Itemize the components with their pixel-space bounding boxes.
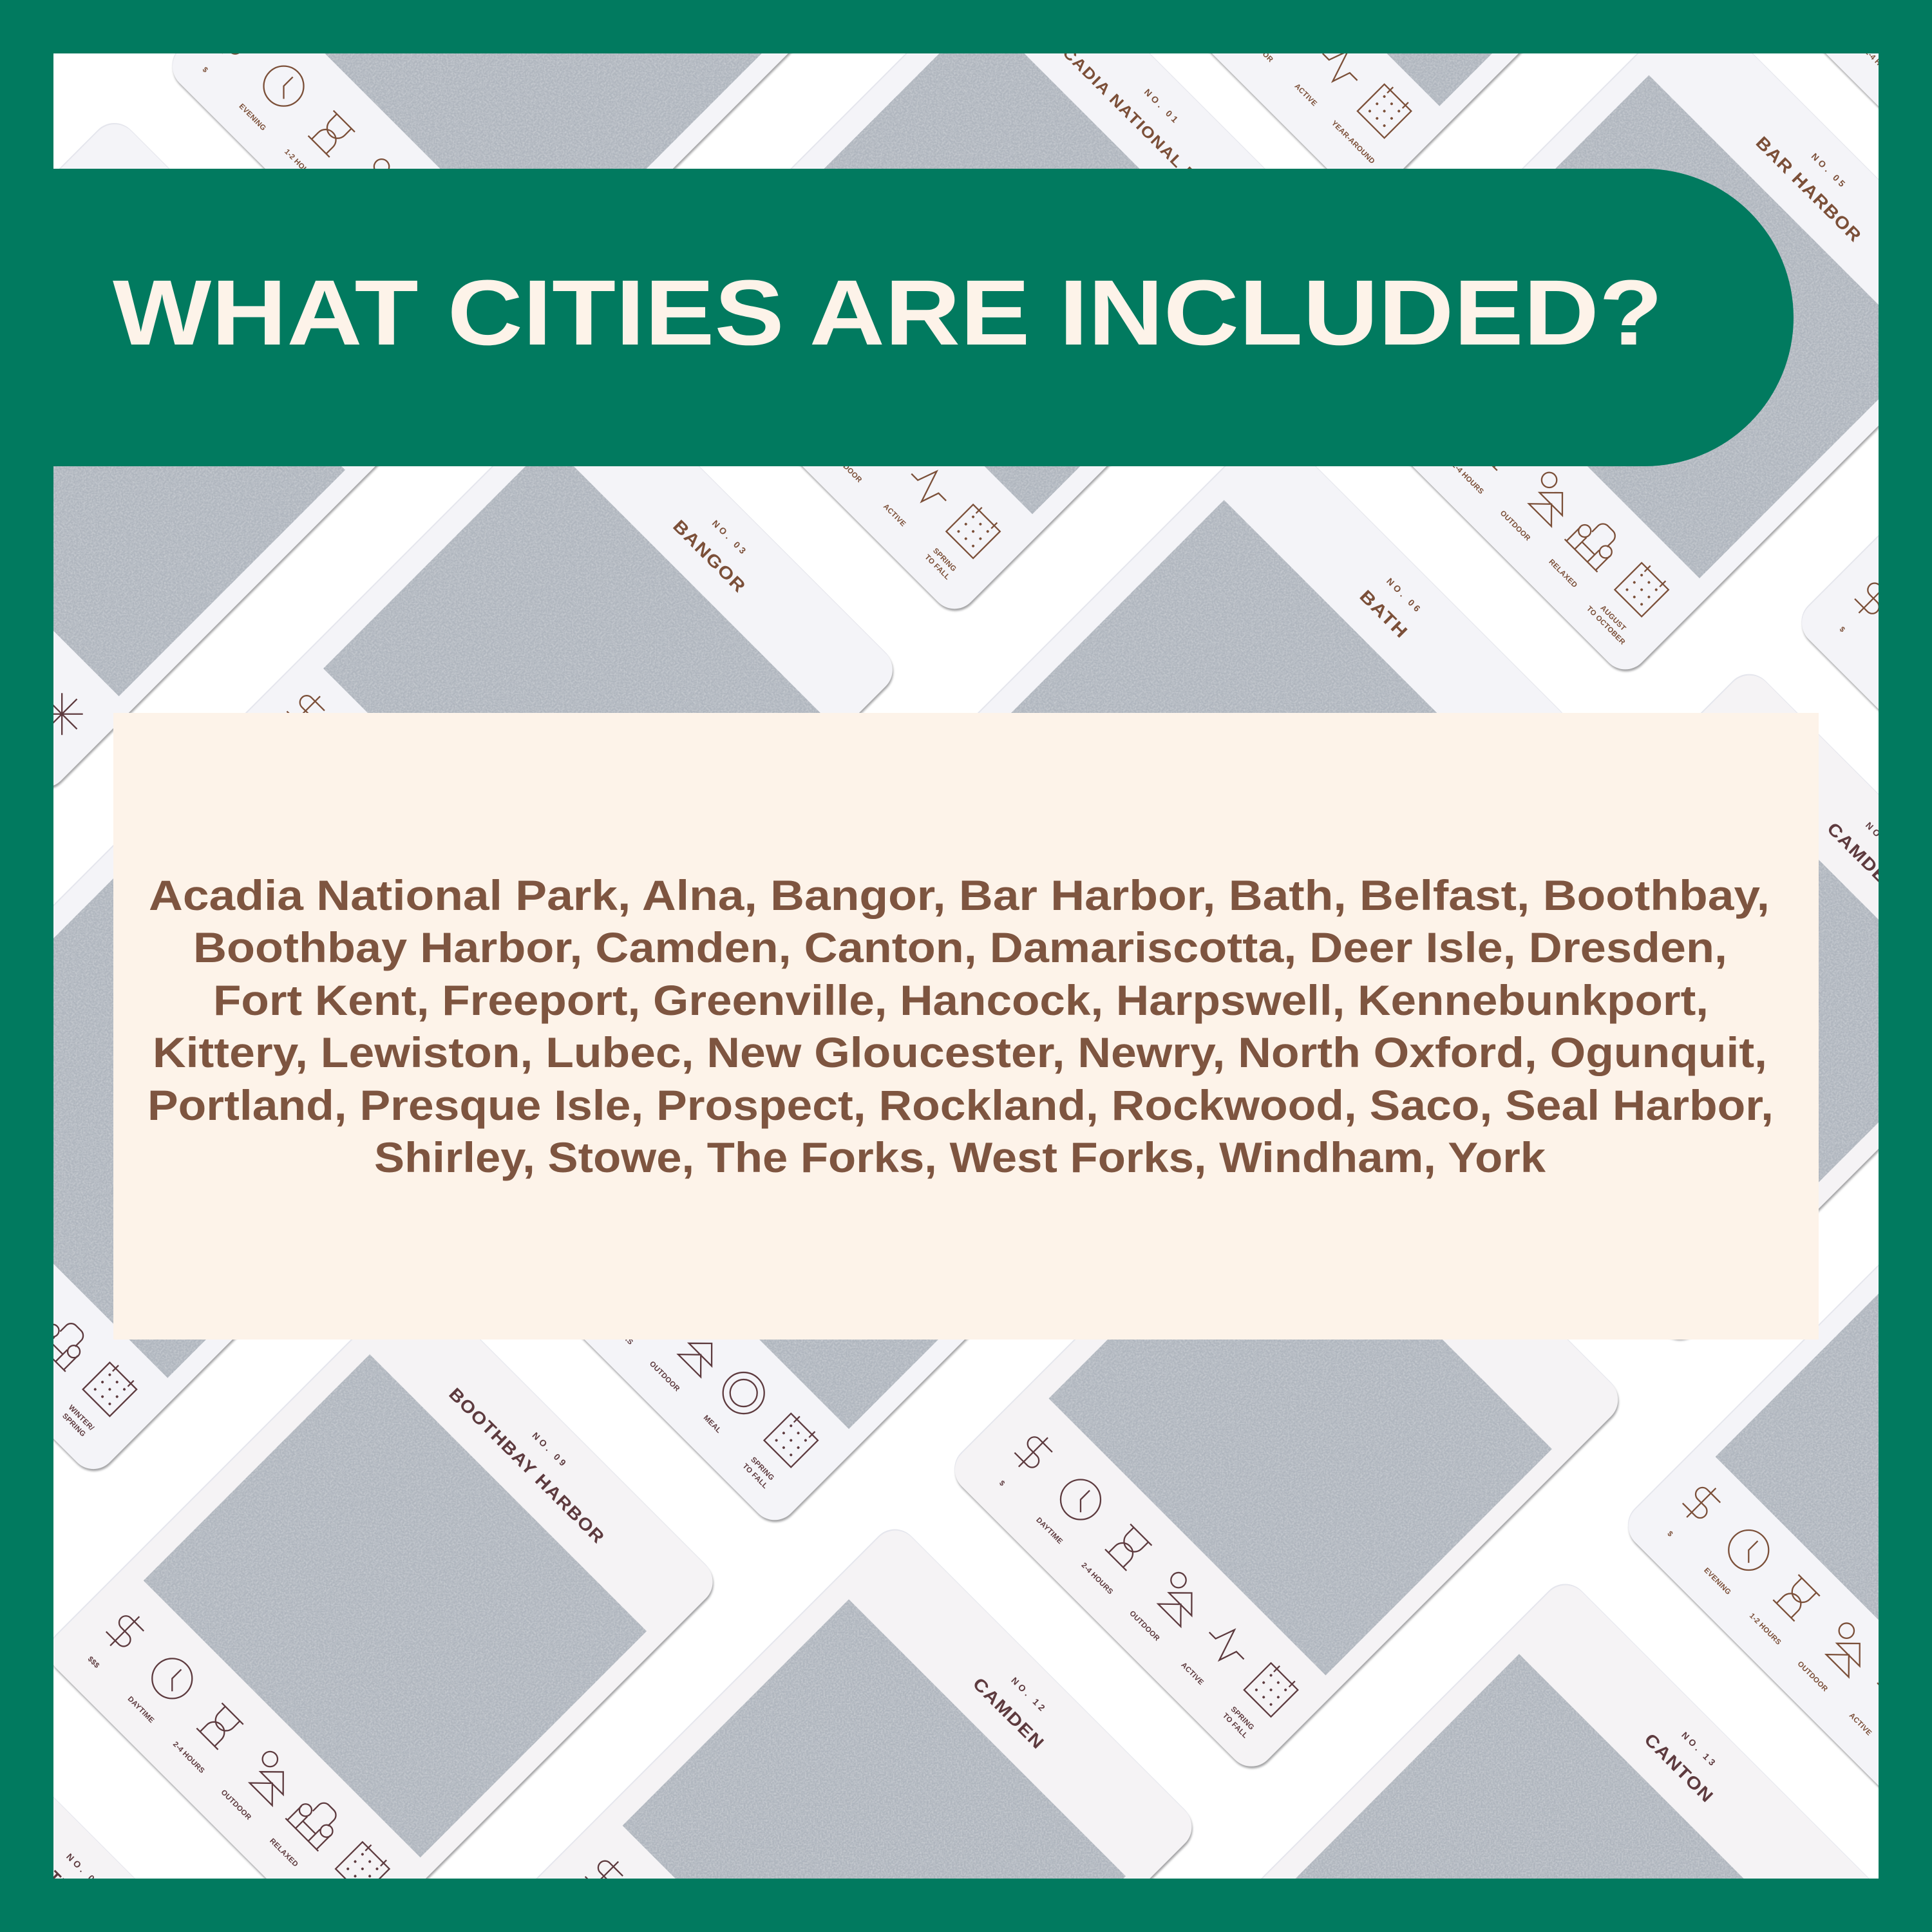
icon: relaxed	[33, 1311, 94, 1372]
card: top right fragment	[1730, 0, 1932, 268]
card number: NO. 09	[530, 1430, 568, 1468]
activity: ACTIVE	[882, 503, 907, 528]
activity	[879, 460, 956, 536]
card number: NO. 01	[1142, 87, 1180, 125]
price: $	[1665, 1530, 1674, 1539]
card: Camden	[535, 1530, 1192, 1900]
price	[1658, 1479, 1725, 1546]
price	[1830, 574, 1897, 642]
time of day: EVENING	[237, 102, 267, 133]
activity	[1177, 1618, 1254, 1695]
setting: OUTDOOR	[648, 1360, 681, 1394]
duration: 2-4 HOURS	[1080, 1562, 1114, 1596]
card name: CAMDEN	[969, 1674, 1048, 1753]
card name: BOOTHBAY	[16, 1840, 99, 1922]
duration: 2-4 HOURS	[171, 1741, 206, 1775]
icon: season asterisk	[32, 684, 92, 744]
setting: OUTDOOR	[220, 1788, 252, 1822]
season: TO OCTOBER	[1585, 605, 1627, 647]
card name: BANGOR	[669, 516, 750, 597]
season: WINTER/	[67, 1404, 95, 1432]
activity: ACTIVE	[1848, 1712, 1873, 1738]
card: winter/spring	[0, 795, 471, 1481]
city list text: Kittery, Lewiston, Lubec, New Gloucester, Newry, North Oxford, Ogunquit,	[153, 1028, 1767, 1076]
season: YEAR-AROUND	[1330, 119, 1376, 166]
card number: NO. 13	[1680, 1730, 1718, 1768]
season: SPRING	[1229, 1705, 1255, 1732]
price: $	[201, 66, 209, 75]
card: bottom-left fragment	[0, 1727, 137, 1922]
card name: BAR HARBOR	[1752, 133, 1866, 246]
price: $$$	[86, 1655, 101, 1670]
card name: ACADIA NATIONAL PARK	[1050, 34, 1228, 213]
card: evening top-left	[172, 53, 793, 169]
season	[336, 1839, 392, 1896]
activity	[1291, 40, 1367, 117]
city list text: Portland, Presque Isle, Prospect, Rockland, Rockwood, Saco, Seal Harbor,	[147, 1081, 1774, 1129]
time of day	[124, 1651, 200, 1727]
mood: RELAXED	[268, 1837, 299, 1869]
setting: OUTDOOR	[1128, 1609, 1161, 1643]
mood	[265, 1790, 346, 1872]
season: AUGUST	[1599, 604, 1627, 632]
mood	[1544, 511, 1625, 593]
price: $	[998, 1479, 1006, 1488]
header banner	[0, 169, 1794, 466]
card name: CAMDEN	[1823, 819, 1902, 898]
card: right edge dollar	[1791, 245, 1932, 931]
title: WHAT CITIES ARE INCLUDED?	[113, 261, 1663, 365]
card: Camden upper	[1372, 665, 1932, 1350]
setting: OUTDOOR	[1499, 509, 1532, 543]
season: SPRING	[931, 547, 958, 573]
time of day: DAYTIME	[1034, 1516, 1064, 1546]
price	[82, 1607, 149, 1675]
activity	[1845, 1669, 1922, 1746]
card: daytime active	[943, 1092, 1629, 1778]
card number: NO. 05	[1810, 151, 1848, 189]
season: SPRING	[61, 1412, 87, 1439]
setting: OUTDOOR	[830, 451, 864, 484]
card name: CANTON	[1640, 1730, 1718, 1806]
setting	[1499, 467, 1579, 547]
season	[1585, 555, 1676, 647]
duration	[1748, 1571, 1824, 1647]
duration: 2-4 HOURS	[1863, 48, 1898, 83]
duration	[285, 109, 355, 169]
city list text: Acadia National Park, Alna, Bangor, Bar Harbor, Bath, Belfast, Boothbay,	[149, 871, 1770, 919]
card name: BATH	[1356, 586, 1412, 642]
card: year-around	[1057, 0, 1743, 209]
card: Boothbay Harbor	[49, 1284, 714, 1896]
duration	[1080, 1520, 1155, 1596]
city list text: Fort Kent, Freeport, Greenville, Hancock, Harpswell, Kennebunkport,	[213, 976, 1709, 1024]
card: Bar Harbor	[1318, 0, 1932, 681]
card number: NO. 03	[710, 518, 748, 556]
card: Bangor	[218, 363, 904, 1048]
card: Canton	[1260, 1584, 1871, 1880]
setting	[374, 158, 390, 169]
time of day	[1032, 1472, 1109, 1548]
price	[990, 1428, 1057, 1496]
card: Acadia National Park	[647, 0, 1336, 620]
season: TO FALL	[741, 1463, 769, 1490]
duration: 1-2 HOURS	[283, 148, 317, 183]
duration: 1-2 HOURS	[1748, 1612, 1783, 1647]
season	[57, 1359, 140, 1441]
price: $	[1838, 625, 1846, 634]
card: meal	[467, 846, 1153, 1531]
time of day: DAYTIME	[126, 1695, 155, 1725]
icon: price	[282, 687, 330, 735]
season: TO FALL	[923, 553, 951, 582]
time of day	[1700, 1522, 1777, 1598]
panel: list of cities	[113, 713, 1819, 1340]
season: TO FALL	[1221, 1712, 1249, 1740]
city list text: Shirley, Stowe, The Forks, West Forks, Windham, York	[374, 1133, 1546, 1181]
setting	[1796, 1618, 1876, 1698]
city list text: Boothbay Harbor, Camden, Canton, Damariscotta, Deer Isle, Dresden,	[193, 923, 1727, 971]
season: SPRING	[749, 1456, 775, 1482]
season	[1219, 1660, 1301, 1742]
season	[921, 502, 1003, 583]
time of day: EVENING	[1702, 1566, 1732, 1596]
card number: NO. 06	[1385, 576, 1423, 614]
card name: BOOTHBAY HARBOR	[445, 1384, 609, 1548]
setting	[1128, 1567, 1208, 1647]
card: evening right	[1617, 1153, 1932, 1832]
duration	[171, 1699, 247, 1775]
setting: OUTDOOR	[1796, 1660, 1829, 1694]
activity: ACTIVE	[1293, 82, 1318, 108]
time of day	[239, 66, 305, 130]
card number: NO. 12	[1009, 1675, 1047, 1713]
city list text	[147, 871, 1774, 1181]
icon: price	[580, 1853, 628, 1900]
card: winter season	[53, 123, 380, 790]
setting	[220, 1746, 299, 1826]
setting: OUTDOOR	[1241, 31, 1274, 64]
season	[1330, 74, 1421, 166]
activity: MEAL	[702, 1414, 723, 1435]
duration: 2-4 HOURS	[1450, 461, 1485, 496]
price	[203, 53, 240, 72]
card number: NO. 08	[64, 1852, 102, 1889]
card: Bath	[893, 421, 1578, 1106]
setting	[648, 1318, 728, 1397]
mood: RELAXED	[1547, 558, 1578, 589]
duration: 2-4 HOURS	[600, 1312, 634, 1347]
activity	[695, 1364, 773, 1442]
activity: ACTIVE	[1179, 1662, 1205, 1687]
season	[739, 1410, 821, 1493]
duration	[1450, 420, 1526, 496]
card number: NO. 11	[1864, 820, 1902, 858]
